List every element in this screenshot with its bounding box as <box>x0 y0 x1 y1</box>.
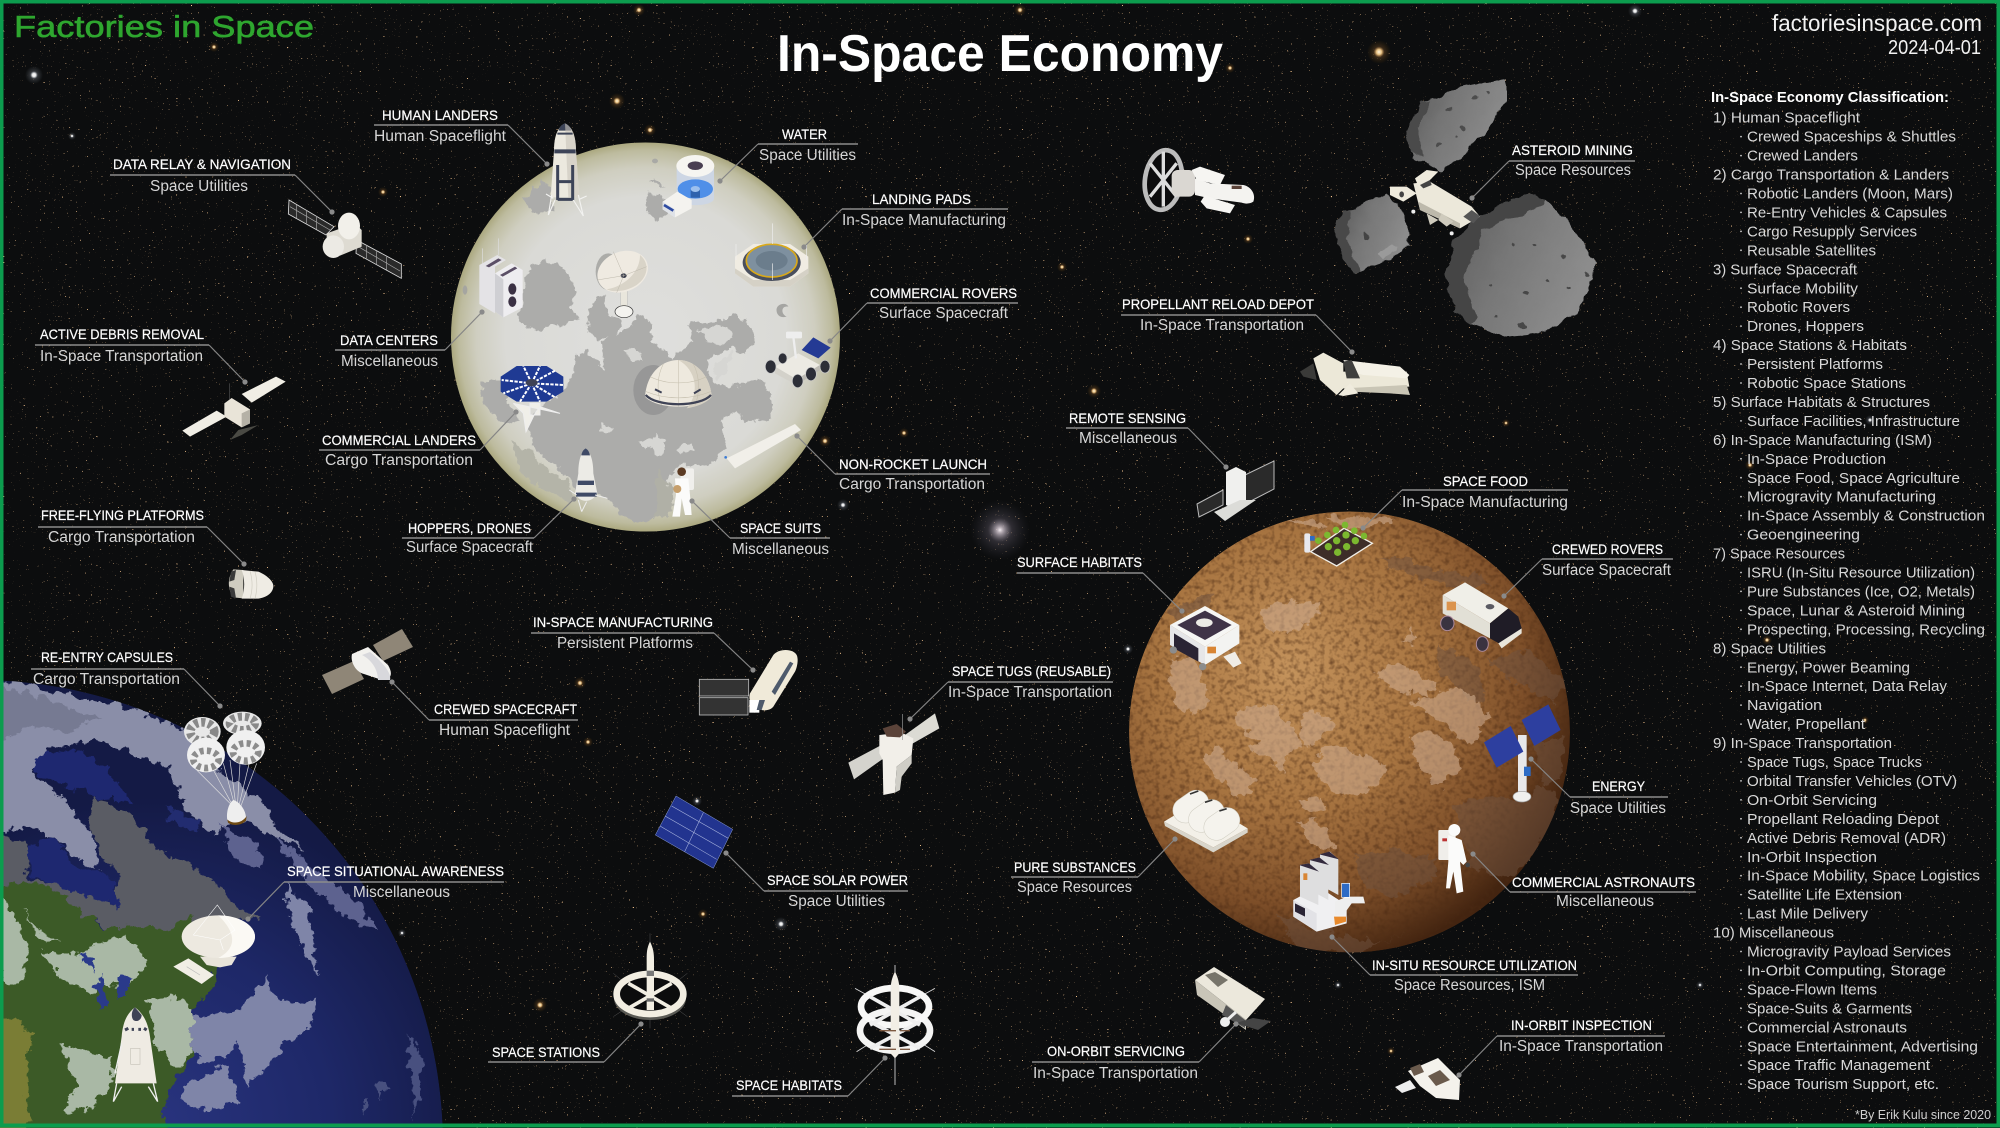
classification items: 5) Surface Habitats & Structures <box>1713 394 1930 411</box>
classification items: 2) Cargo Transportation & Landers <box>1713 167 1949 184</box>
label: asteroid mining: ASTEROID MINING <box>1512 143 1633 158</box>
icon: data centers <box>479 238 523 317</box>
classification items: Surface Facilities, Infrastructure <box>1747 413 1960 430</box>
classification items: Last Mile Delivery <box>1747 906 1869 923</box>
label: asteroid mining: Space Resources <box>1515 162 1631 179</box>
moon light islands <box>600 323 733 458</box>
label: commercial rovers: COMMERCIAL ROVERS <box>870 286 1017 301</box>
icon: space solar power <box>655 796 733 868</box>
classification items: Reusable Satellites <box>1747 242 1876 259</box>
classification items: Satellite Life Extension <box>1747 887 1902 904</box>
planet: Mars <box>1129 512 1570 953</box>
icon: space tug <box>848 713 939 795</box>
label: crewed spacecraft <box>389 679 578 739</box>
icon: re-entry capsule with parachutes <box>184 712 265 825</box>
icon: space habitats <box>855 965 935 1085</box>
label: space stations: SPACE STATIONS <box>492 1045 600 1060</box>
classification items <box>1713 110 1985 1093</box>
label: space tugs: In-Space Transportation <box>948 684 1112 701</box>
classification items: Geoengineering <box>1747 527 1860 544</box>
classification items: Space Tourism Support, etc. <box>1747 1076 1939 1093</box>
classification items: Active Debris Removal (ADR) <box>1747 830 1946 847</box>
classification items: On-Orbit Servicing <box>1747 792 1877 809</box>
label: energy <box>1528 756 1668 817</box>
icon: crewed rover <box>1441 582 1522 651</box>
label: commercial landers: Cargo Transportation <box>325 452 473 469</box>
label: water <box>717 127 858 184</box>
label: on-orbit servicing: In-Space Transportation <box>1033 1065 1198 1082</box>
label: space situational awareness: Miscellaneous <box>353 884 450 901</box>
classification items: Cargo Resupply Services <box>1747 223 1917 240</box>
icon: asteroid large <box>1445 193 1595 337</box>
label: in-situ resource utilization: IN-SITU RESOURCE UTILIZATION <box>1372 958 1577 973</box>
label: landing pads: In-Space Manufacturing <box>842 212 1006 229</box>
label: re-entry capsules: Cargo Transportation <box>33 671 180 688</box>
label: energy: Space Utilities <box>1570 800 1666 817</box>
icon: dome habitat <box>633 360 712 415</box>
label: commercial astronauts: COMMERCIAL ASTRONAUTS <box>1512 875 1695 890</box>
classification items: Surface Mobility <box>1747 280 1859 297</box>
label: energy: ENERGY <box>1592 779 1645 794</box>
label: space stations <box>488 1021 644 1062</box>
label: landing pads <box>801 192 1008 250</box>
icon: active debris removal satellite <box>182 377 286 440</box>
label: space solar power <box>723 850 908 910</box>
icon: spinning-ring spaceship <box>1141 148 1254 213</box>
classification items: 10) Miscellaneous <box>1713 925 1834 942</box>
classification items: Space, Lunar & Asteroid Mining <box>1747 602 1965 619</box>
icon: landing pad <box>735 223 808 287</box>
icon: in-orbit inspection spacecraft <box>1395 1058 1460 1100</box>
icon: in-space manufacturing platform <box>699 650 798 715</box>
classification items: Space-Flown Items <box>1747 981 1877 998</box>
icon: asteroid mining ship <box>1390 170 1480 235</box>
label: surface habitats: SURFACE HABITATS <box>1017 555 1142 570</box>
label: free-flying platforms <box>38 508 247 567</box>
label: surface habitats <box>1017 555 1185 614</box>
label: in-orbit inspection <box>1456 1018 1665 1078</box>
classification items: Commercial Astronauts <box>1747 1019 1907 1036</box>
label: remote sensing: Miscellaneous <box>1079 430 1177 447</box>
classification items: Persistent Platforms <box>1747 356 1883 373</box>
classification items: 3) Surface Spacecraft <box>1713 261 1858 278</box>
classification items: 1) Human Spaceflight <box>1713 110 1861 127</box>
label: hoppers, drones <box>402 496 577 556</box>
icon: human lander <box>546 123 587 216</box>
label: free-flying platforms: Cargo Transportation <box>48 529 195 546</box>
label: free-flying platforms: FREE-FLYING PLATFORMS <box>41 508 204 523</box>
label: human landers: Human Spaceflight <box>374 128 507 145</box>
earth desert <box>0 1008 33 1128</box>
label: space tugs <box>907 664 1113 722</box>
icon: radio dish <box>591 243 654 318</box>
label: in-orbit inspection: IN-ORBIT INSPECTION <box>1511 1018 1652 1033</box>
planet: Earth <box>0 678 443 1128</box>
icon: space station <box>613 933 687 1028</box>
classification heading: In-Space Economy Classification: <box>1711 89 1949 106</box>
classification items: In-Space Mobility, Space Logistics <box>1747 868 1980 885</box>
icon: asteroid left <box>1337 193 1410 273</box>
classification items: Space Traffic Management <box>1747 1057 1931 1074</box>
earth land clouds <box>0 883 195 1113</box>
label: space solar power: Space Utilities <box>788 893 885 910</box>
classification items: Crewed Spaceships & Shuttles <box>1747 129 1956 146</box>
classification items: Microgravity Payload Services <box>1747 944 1951 960</box>
label: space suits: Miscellaneous <box>732 541 829 558</box>
label: space habitats <box>732 1055 888 1096</box>
label: re-entry capsules <box>31 650 223 709</box>
planet: Moon <box>451 123 840 531</box>
classification items: Re-Entry Vehicles & Capsules <box>1747 204 1947 221</box>
label: active debris removal: ACTIVE DEBRIS REMOVAL <box>40 327 204 342</box>
classification items: 4) Space Stations & Habitats <box>1713 337 1907 354</box>
classification items: Prospecting, Processing, Recycling <box>1747 621 1985 638</box>
label: commercial landers: COMMERCIAL LANDERS <box>322 433 476 448</box>
label: propellant reload depot: In-Space Transportation <box>1140 317 1304 334</box>
label: data relay and navigation <box>110 157 335 215</box>
classification items: Navigation <box>1747 697 1822 714</box>
label: space habitats: SPACE HABITATS <box>736 1078 842 1093</box>
label: in-space manufacturing: IN-SPACE MANUFACTURING <box>533 615 713 630</box>
icon: commercial lander <box>501 366 563 432</box>
label: on-orbit servicing <box>1032 1021 1239 1082</box>
label: crewed spacecraft: CREWED SPACECRAFT <box>434 702 577 717</box>
classification items: Space-Suits & Garments <box>1747 1000 1912 1017</box>
classification items: Water, Propellant <box>1747 716 1866 733</box>
icon: surface habitat <box>1170 606 1242 670</box>
classification items: Crewed Landers <box>1747 148 1858 165</box>
label: pure substances <box>1011 836 1178 896</box>
icon: crewed lander on Earth <box>113 1007 158 1102</box>
classification items: In-Space Assembly & Construction <box>1747 508 1985 525</box>
label: hoppers, drones: Surface Spacecraft <box>406 539 534 556</box>
label: human landers <box>374 108 550 167</box>
label: propellant reload depot <box>1121 297 1355 355</box>
classification items: Space Food, Space Agriculture <box>1747 470 1960 487</box>
label: active debris removal <box>35 327 248 385</box>
classification items: In-Orbit Inspection <box>1747 849 1877 866</box>
label: on-orbit servicing: ON-ORBIT SERVICING <box>1047 1044 1185 1059</box>
label: space food: In-Space Manufacturing <box>1402 494 1568 511</box>
moon maria <box>483 180 773 523</box>
label: commercial landers <box>319 409 519 469</box>
classification items: Drones, Hoppers <box>1747 318 1864 335</box>
label: crewed rovers <box>1501 542 1673 599</box>
label: water: WATER <box>782 127 827 142</box>
label: pure substances: Space Resources <box>1017 879 1132 896</box>
icon: space situational awareness dish <box>173 905 255 984</box>
label: propellant reload depot: PROPELLANT RELOAD DEPOT <box>1122 297 1314 312</box>
mars dark patches <box>1167 558 1567 953</box>
label: remote sensing: REMOTE SENSING <box>1069 411 1186 426</box>
icon: ISRU plant <box>1293 852 1365 932</box>
classification items: Space Tugs, Space Trucks <box>1747 754 1922 771</box>
icon: remote sensing satellite <box>1197 461 1274 521</box>
website: factoriesinspace.com <box>1772 10 1982 36</box>
classification items: 6) In-Space Manufacturing (ISM) <box>1713 432 1932 449</box>
earth green land <box>0 880 213 1128</box>
label: remote sensing <box>1066 411 1229 470</box>
classification items: ISRU (In-Situ Resource Utilization) <box>1747 564 1975 582</box>
label: crewed rovers: Surface Spacecraft <box>1542 562 1672 579</box>
title: In-Space Economy <box>777 25 1223 83</box>
date: 2024-04-01 <box>1888 37 1981 59</box>
icon: non-rocket launch rail <box>724 424 801 468</box>
icon: solar energy tower <box>1484 704 1561 802</box>
earth grey land <box>0 797 260 935</box>
classification items: Propellant Reloading Depot <box>1747 811 1940 828</box>
label: data centers: Miscellaneous <box>341 353 438 370</box>
galaxy <box>970 500 1030 560</box>
label: data relay and navigation: DATA RELAY & NAVIGATION <box>113 157 291 172</box>
label: in-situ resource utilization <box>1329 934 1578 994</box>
icon: on-orbit servicing spacecraft <box>1195 967 1271 1030</box>
label: commercial rovers <box>827 286 1018 344</box>
label: re-entry capsules: RE-ENTRY CAPSULES <box>41 650 173 665</box>
label: space food <box>1360 474 1568 531</box>
label: space tugs: SPACE TUGS (REUSABLE) <box>952 664 1111 679</box>
label: crewed spacecraft: Human Spaceflight <box>439 722 571 739</box>
label: space food: SPACE FOOD <box>1443 474 1528 489</box>
label: crewed rovers: CREWED ROVERS <box>1552 542 1663 557</box>
label: non-rocket launch <box>794 433 990 493</box>
classification items: In-Space Internet, Data Relay <box>1747 678 1948 695</box>
classification items: Orbital Transfer Vehicles (OTV) <box>1747 773 1957 790</box>
label: hoppers, drones: HOPPERS, DRONES <box>408 521 531 536</box>
label: in-situ resource utilization: Space Resources, ISM <box>1394 977 1545 994</box>
label: data centers: DATA CENTERS <box>340 333 438 348</box>
icon: crewed spacecraft <box>322 629 413 694</box>
label: space suits: SPACE SUITS <box>740 521 821 536</box>
label: in-space manufacturing: Persistent Platforms <box>557 635 693 652</box>
icon: space food farm <box>1304 522 1372 566</box>
label: in-orbit inspection: In-Space Transportation <box>1499 1038 1663 1055</box>
label: space situational awareness <box>245 864 504 922</box>
label: data centers <box>335 309 485 370</box>
classification items: 8) Space Utilities <box>1713 640 1826 657</box>
label: in-space manufacturing <box>531 615 756 673</box>
icon: asteroid top <box>1407 78 1505 170</box>
classification items: 9) In-Space Transportation <box>1713 735 1892 752</box>
label: space situational awareness: SPACE SITUATIONAL AWARENESS <box>287 864 504 879</box>
label: asteroid mining <box>1469 143 1635 201</box>
icon: free-flying platform <box>229 569 273 599</box>
classification items: Robotic Landers (Moon, Mars) <box>1747 186 1953 202</box>
classification items: In-Space Production <box>1747 451 1886 468</box>
classification items: Pure Substances (Ice, O2, Metals) <box>1747 583 1975 600</box>
credit: *By Erik Kulu since 2020 <box>1855 1107 1991 1122</box>
icon: hopper <box>569 448 607 512</box>
label: active debris removal: In-Space Transportation <box>40 348 203 365</box>
icon: commercial rover <box>765 332 831 388</box>
brand: Factories in Space: Factories in Space <box>14 9 314 44</box>
label: space solar power: SPACE SOLAR POWER <box>767 873 908 888</box>
label: commercial astronauts: Miscellaneous <box>1556 893 1654 910</box>
icon: water facility <box>663 155 714 217</box>
classification items: Microgravity Manufacturing <box>1747 489 1936 506</box>
classification items: Space Entertainment, Advertising <box>1747 1038 1978 1055</box>
classification items: In-Orbit Computing, Storage <box>1747 962 1946 979</box>
label: commercial rovers: Surface Spacecraft <box>879 305 1009 322</box>
label: data relay and navigation: Space Utilities <box>150 178 248 195</box>
icon: propellant reload depot <box>1300 353 1410 396</box>
classification items: Robotic Rovers <box>1747 299 1850 316</box>
classification items: Robotic Space Stations <box>1747 375 1906 392</box>
label: non-rocket launch: NON-ROCKET LAUNCH <box>839 457 987 472</box>
label: space suits <box>689 498 830 558</box>
classification items: Energy, Power Beaming <box>1747 659 1910 676</box>
classification items: 7) Space Resources <box>1713 546 1845 563</box>
icon: pure substances tanks <box>1164 785 1248 852</box>
earth upper clouds <box>0 678 303 870</box>
label: pure substances: PURE SUBSTANCES <box>1014 860 1136 875</box>
earth ocean clouds <box>180 883 320 1110</box>
label: water: Space Utilities <box>759 147 856 164</box>
label: commercial astronauts <box>1470 851 1696 910</box>
icon: commercial astronaut <box>1438 824 1470 893</box>
icon: astronaut <box>672 467 694 517</box>
label: human landers: HUMAN LANDERS <box>382 108 498 123</box>
label: non-rocket launch: Cargo Transportation <box>839 476 985 493</box>
mars light patches <box>1168 517 1488 850</box>
panel: classification list <box>1711 89 1985 1093</box>
icon: data relay satellite <box>288 200 401 278</box>
label: landing pads: LANDING PADS <box>872 192 971 207</box>
